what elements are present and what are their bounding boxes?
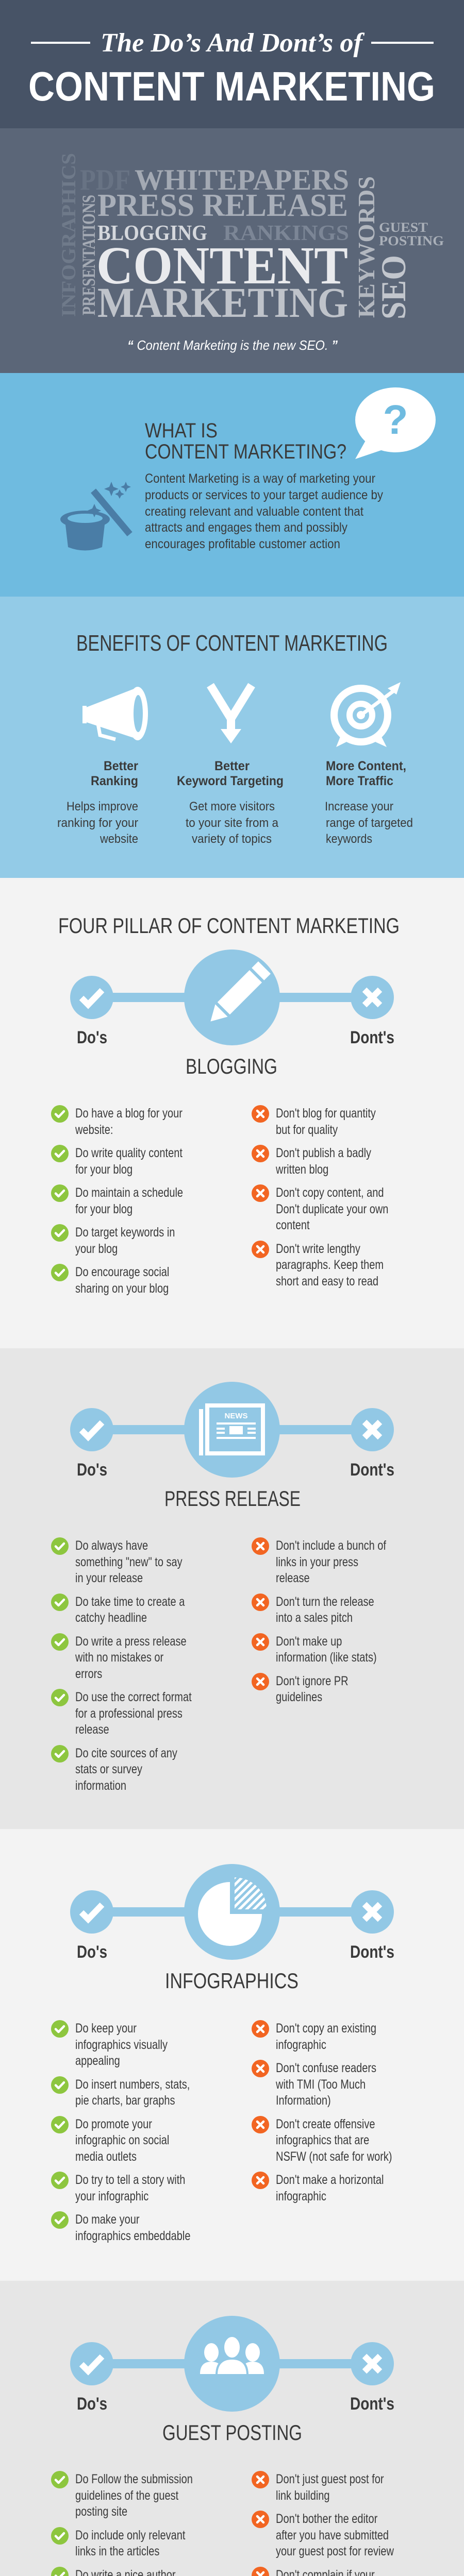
- word cloud: BLOGGING: [97, 222, 207, 245]
- title script line: The Do’s And Dont’s of: [101, 28, 365, 58]
- timeline: guest posting: Dont's: [350, 2394, 394, 2414]
- benefit descriptions: website: [100, 832, 138, 846]
- list: press don'ts: into a sales pitch: [276, 1611, 353, 1625]
- list: infographics do's: Do promote your: [75, 2116, 152, 2131]
- body text: creating relevant and valuable content that: [145, 504, 363, 519]
- timeline: press release: Do's: [77, 1460, 107, 1480]
- list: press do's: release: [75, 1722, 109, 1737]
- list: infographics do's: [51, 2020, 190, 2243]
- benefit labels: [91, 759, 406, 788]
- list: infographics do's: Do make your: [75, 2212, 139, 2227]
- list: blogging do's: [51, 1105, 183, 1295]
- icon: magic hat and wand: [60, 482, 132, 550]
- list: blogging don'ts: Don't copy content, and: [276, 1185, 384, 1200]
- list: press do's: Do always have: [75, 1538, 148, 1553]
- list: press don'ts: information (like stats): [276, 1650, 377, 1665]
- list: infographics do's: infographics visually: [75, 2037, 168, 2052]
- list: infographics don'ts: Don't make a horizontal: [276, 2173, 384, 2187]
- list: infographics do's: Do keep your: [75, 2021, 137, 2036]
- icon: target: [334, 688, 394, 742]
- list: blogging do's: for your blog: [75, 1162, 132, 1177]
- list: blogging don'ts: Don't publish a badly: [276, 1146, 371, 1160]
- list: press do's: Do use the correct format: [75, 1690, 192, 1704]
- list: press don'ts: release: [276, 1571, 310, 1585]
- list: press do's: in your release: [75, 1571, 143, 1585]
- benefit descriptions: to your site from a: [186, 816, 279, 830]
- benefit descriptions: variety of topics: [192, 832, 272, 846]
- list: infographics do's: appealing: [75, 2054, 120, 2068]
- word cloud panel: [0, 128, 464, 373]
- body text: Content Marketing is a way of marketing your: [145, 471, 375, 486]
- list: guest don'ts: your guest post for review: [276, 2544, 394, 2558]
- heading: WHAT IS: [145, 419, 218, 442]
- list: press do's: Do take time to create a: [75, 1594, 185, 1608]
- list: infographics do's: pie charts, bar graphs: [75, 2093, 175, 2108]
- heading: CONTENT MARKETING?: [145, 440, 346, 463]
- word cloud: GUEST: [379, 220, 428, 235]
- panel: guest posting: [0, 2281, 464, 2576]
- list: blogging don'ts: written blog: [276, 1162, 328, 1177]
- icon: people: [200, 2336, 264, 2375]
- icon: merging arrow: [210, 685, 252, 734]
- timeline: press release: Dont's: [350, 1460, 394, 1480]
- word cloud: RANKINGS: [223, 222, 349, 245]
- body text: products or services to your target audience by: [145, 488, 383, 502]
- list: press don'ts: links in your press: [276, 1555, 358, 1569]
- list: press do's: information: [75, 1778, 126, 1793]
- list: blogging do's: Do have a blog for your: [75, 1106, 183, 1121]
- list: press do's: catchy headline: [75, 1611, 147, 1625]
- list: blogging do's: Do write quality content: [75, 1146, 183, 1160]
- list: blogging do's: for your blog: [75, 1201, 132, 1216]
- list: press do's: something "new" to say: [75, 1555, 183, 1569]
- timeline: blogging: Do's: [77, 1028, 107, 1047]
- list: guest don'ts: link building: [276, 2488, 330, 2503]
- timeline: press release: PRESS RELEASE: [164, 1486, 301, 1511]
- list: guest don'ts: Don't bother the editor: [276, 2512, 377, 2526]
- timeline: guest posting: [70, 2316, 394, 2445]
- list: blogging do's: Do encourage social: [75, 1265, 169, 1279]
- list: press don'ts: Don't ignore PR: [276, 1673, 349, 1688]
- list: blogging don'ts: [252, 1105, 388, 1288]
- timeline: infographics: [70, 1864, 394, 1993]
- list: press do's: [51, 1537, 192, 1793]
- list: infographics don'ts: infographic: [276, 2189, 326, 2203]
- word cloud: PDF: [80, 164, 130, 196]
- timeline: infographics: Do's: [77, 1942, 107, 1962]
- list: infographics do's: Do try to tell a story with: [75, 2173, 185, 2187]
- panel: infographics: [0, 1829, 464, 2281]
- list: guest do's: Do Follow the submission: [75, 2472, 193, 2486]
- benefit labels: Better: [104, 759, 138, 773]
- timeline: guest posting: GUEST POSTING: [162, 2420, 302, 2445]
- list: infographics do's: infographic on social: [75, 2133, 169, 2147]
- body text: attracts and engages them and possibly: [145, 520, 347, 535]
- icon: speech bubble question: ?: [383, 397, 408, 443]
- word cloud: POSTING: [379, 233, 444, 248]
- timeline: blogging: BLOGGING: [186, 1054, 277, 1078]
- icon: pie chart: [198, 1877, 267, 1946]
- list: infographics don'ts: [252, 2020, 392, 2203]
- benefit descriptions: keywords: [326, 832, 372, 846]
- list: infographics don'ts: Don't create offensive: [276, 2116, 375, 2131]
- header panel: [0, 0, 464, 128]
- word cloud: INFOGRAPHICS: [58, 153, 80, 317]
- body text: encourages profitable customer action: [145, 537, 340, 551]
- word cloud: CONTENT: [96, 236, 348, 295]
- list: blogging do's: Do maintain a schedule: [75, 1185, 183, 1200]
- icon: newspaper: [199, 1403, 265, 1455]
- list: blogging do's: Do target keywords in: [75, 1225, 175, 1240]
- benefit labels: More Content,: [326, 759, 406, 773]
- list: press don'ts: Don't turn the release: [276, 1594, 374, 1608]
- panel: what is content marketing: [0, 373, 464, 597]
- list: infographics don'ts: with TMI (Too Much: [276, 2077, 366, 2092]
- icon: megaphone: [82, 687, 148, 740]
- word cloud: SEO: [374, 255, 413, 319]
- list: guest do's: [51, 2471, 193, 2576]
- list: guest do's: links in the articles: [75, 2544, 159, 2558]
- list: infographics don'ts: infographics that are: [276, 2133, 369, 2147]
- list: infographics do's: Do insert numbers, stats,: [75, 2077, 190, 2092]
- benefit descriptions: Helps improve: [67, 800, 138, 814]
- benefit descriptions: [57, 800, 413, 846]
- list: press don'ts: [252, 1537, 386, 1704]
- body text: [145, 471, 383, 551]
- word cloud: MARKETING: [97, 279, 348, 326]
- timeline: infographics: INFOGRAPHICS: [165, 1969, 299, 1993]
- list: press don'ts: Don't include a bunch of: [276, 1538, 386, 1553]
- list: guest don'ts: [252, 2471, 394, 2576]
- list: blogging do's: sharing on your blog: [75, 1281, 169, 1295]
- icon: newspaper: NEWS: [225, 1412, 247, 1420]
- timeline: guest posting: Do's: [77, 2394, 107, 2414]
- quote: “ Content Marketing is the new SEO. ”: [127, 337, 338, 353]
- icon: pencil: [204, 961, 271, 1028]
- list: infographics don'ts: Information): [276, 2093, 331, 2108]
- list: blogging don'ts: short and easy to read: [276, 1274, 378, 1288]
- benefit labels: Ranking: [91, 774, 138, 788]
- list: guest don'ts: after you have submitted: [276, 2528, 389, 2542]
- benefit descriptions: Increase your: [325, 800, 393, 814]
- timeline: blogging: Dont's: [350, 1028, 394, 1047]
- list: blogging don'ts: Don't write lengthy: [276, 1242, 360, 1256]
- list: infographics don'ts: infographic: [276, 2037, 326, 2052]
- word cloud: WHITEPAPERS: [135, 164, 349, 196]
- list: press do's: stats or survey: [75, 1762, 142, 1776]
- list: blogging don'ts: but for quality: [276, 1122, 338, 1137]
- list: press do's: with no mistakes or: [75, 1650, 163, 1665]
- word cloud: KEYWORDS: [353, 176, 379, 318]
- word cloud: [58, 153, 444, 326]
- word cloud: PRESS RELEASE: [97, 188, 348, 223]
- list: press do's: for a professional press: [75, 1706, 183, 1721]
- benefit labels: Keyword Targeting: [177, 774, 284, 788]
- list: infographics do's: your infographic: [75, 2189, 148, 2203]
- list: blogging do's: website:: [75, 1122, 113, 1137]
- benefit labels: Better: [214, 759, 250, 773]
- benefit descriptions: Get more visitors: [189, 800, 275, 814]
- word cloud: PRESENTATIONS: [78, 195, 99, 315]
- list: blogging don'ts: content: [276, 1218, 310, 1232]
- list: guest do's: posting site: [75, 2504, 127, 2519]
- list: press do's: errors: [75, 1666, 102, 1681]
- list: press do's: Do cite sources of any: [75, 1745, 177, 1760]
- list: blogging do's: your blog: [75, 1242, 118, 1256]
- title script line: [31, 28, 434, 58]
- benefit descriptions: ranking for your: [57, 816, 138, 830]
- timeline: press release: [70, 1382, 394, 1511]
- list: infographics do's: infographics embeddable: [75, 2229, 190, 2243]
- panel: press release: [0, 1348, 464, 1829]
- icon: speech bubble question: [355, 387, 436, 459]
- list: blogging don'ts: Don't duplicate your own: [276, 1201, 388, 1216]
- timeline: blogging: [70, 950, 394, 1078]
- list: blogging don'ts: paragraphs. Keep them: [276, 1258, 384, 1272]
- list: guest do's: Do include only relevant: [75, 2528, 185, 2542]
- list: infographics do's: media outlets: [75, 2149, 137, 2164]
- list: guest do's: guidelines of the guest: [75, 2488, 178, 2503]
- panel: blogging: [0, 878, 464, 1348]
- list: press don'ts: guidelines: [276, 1690, 322, 1704]
- panel: benefits: [0, 597, 464, 878]
- list: guest don'ts: Don't just guest post for: [276, 2472, 384, 2486]
- benefit labels: More Traffic: [326, 774, 393, 788]
- benefit descriptions: range of targeted: [326, 816, 413, 830]
- list: infographics don'ts: Don't copy an existing: [276, 2021, 376, 2036]
- list: press do's: Do write a press release: [75, 1634, 187, 1649]
- list: infographics don'ts: Don't confuse readers: [276, 2061, 376, 2075]
- list: blogging don'ts: Don't blog for quantity: [276, 1106, 376, 1121]
- list: infographics don'ts: NSFW (not safe for work): [276, 2149, 392, 2164]
- list: press don'ts: Don't make up: [276, 1634, 342, 1649]
- timeline: infographics: Dont's: [350, 1942, 394, 1962]
- heading: [145, 419, 346, 463]
